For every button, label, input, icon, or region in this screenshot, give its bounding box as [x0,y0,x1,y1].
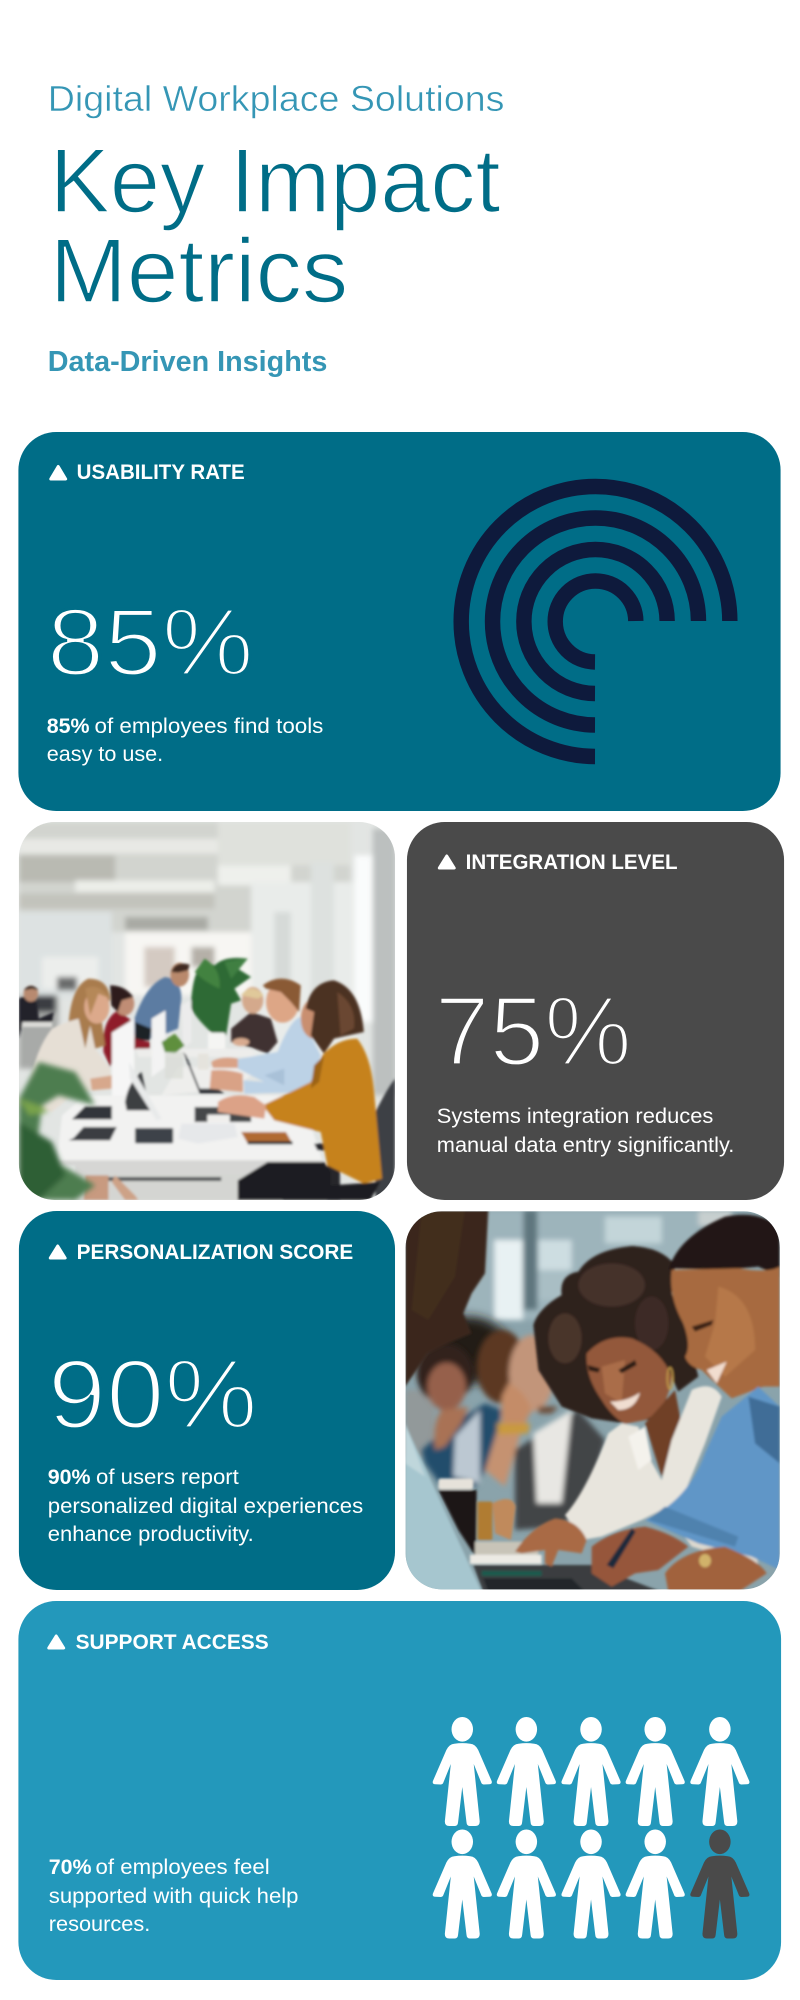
icon: usability triangle [51,466,66,479]
heading: personalization score: PERSONALIZATION SCORE [77,1241,353,1264]
panel: integration level [407,822,784,1200]
photo: open-plan office with people at desks [19,822,396,1200]
icon: personalization triangle [50,1246,65,1258]
eyebrow: Digital Workplace Solutions: Digital Workplace Solutions [48,78,504,119]
icon: integration triangle [439,856,454,868]
description: personalization: of users report [96,1465,239,1489]
heading: integration level: INTEGRATION LEVEL [466,851,678,874]
stat: 75%: 75% [435,977,632,1086]
stat: 85%: 85% [47,589,254,696]
description: support: 70% [49,1855,92,1879]
description: personalization: 90% [48,1465,91,1489]
title: Key Impact Metrics: Key Impact [50,131,500,232]
pictogram: 9 of 10 people highlighted [433,1717,749,1938]
panel: usability rate [18,432,781,811]
description: integration: Systems integration reduces [437,1104,713,1128]
stat: 90%: 90% [48,1340,258,1449]
icon: support triangle [49,1636,64,1648]
photo: colleagues smiling around a laptop [405,1210,785,1592]
description: support: resources. [49,1912,150,1936]
description: support: supported with quick help [49,1884,299,1908]
panel: personalization score [19,1211,395,1590]
description: support: of employees feel [96,1855,270,1879]
title: Key Impact Metrics [50,131,500,322]
description: usability: 85% [47,714,90,738]
chart: concentric arcs [461,487,730,756]
description: personalization: personalized digital experiences [48,1494,363,1518]
title: Key Impact Metrics: Metrics [50,221,348,322]
description: personalization: enhance productivity. [48,1522,254,1546]
description: usability: of employees find tools [95,714,323,738]
description: integration: manual data entry significantly. [437,1133,734,1157]
heading: usability rate: USABILITY RATE [77,461,245,484]
panel: support access [18,1601,781,1980]
description: usability: easy to use. [47,742,163,766]
subtitle: Data-Driven Insights: Data-Driven Insights [48,346,327,378]
heading: support access: SUPPORT ACCESS [76,1631,269,1654]
